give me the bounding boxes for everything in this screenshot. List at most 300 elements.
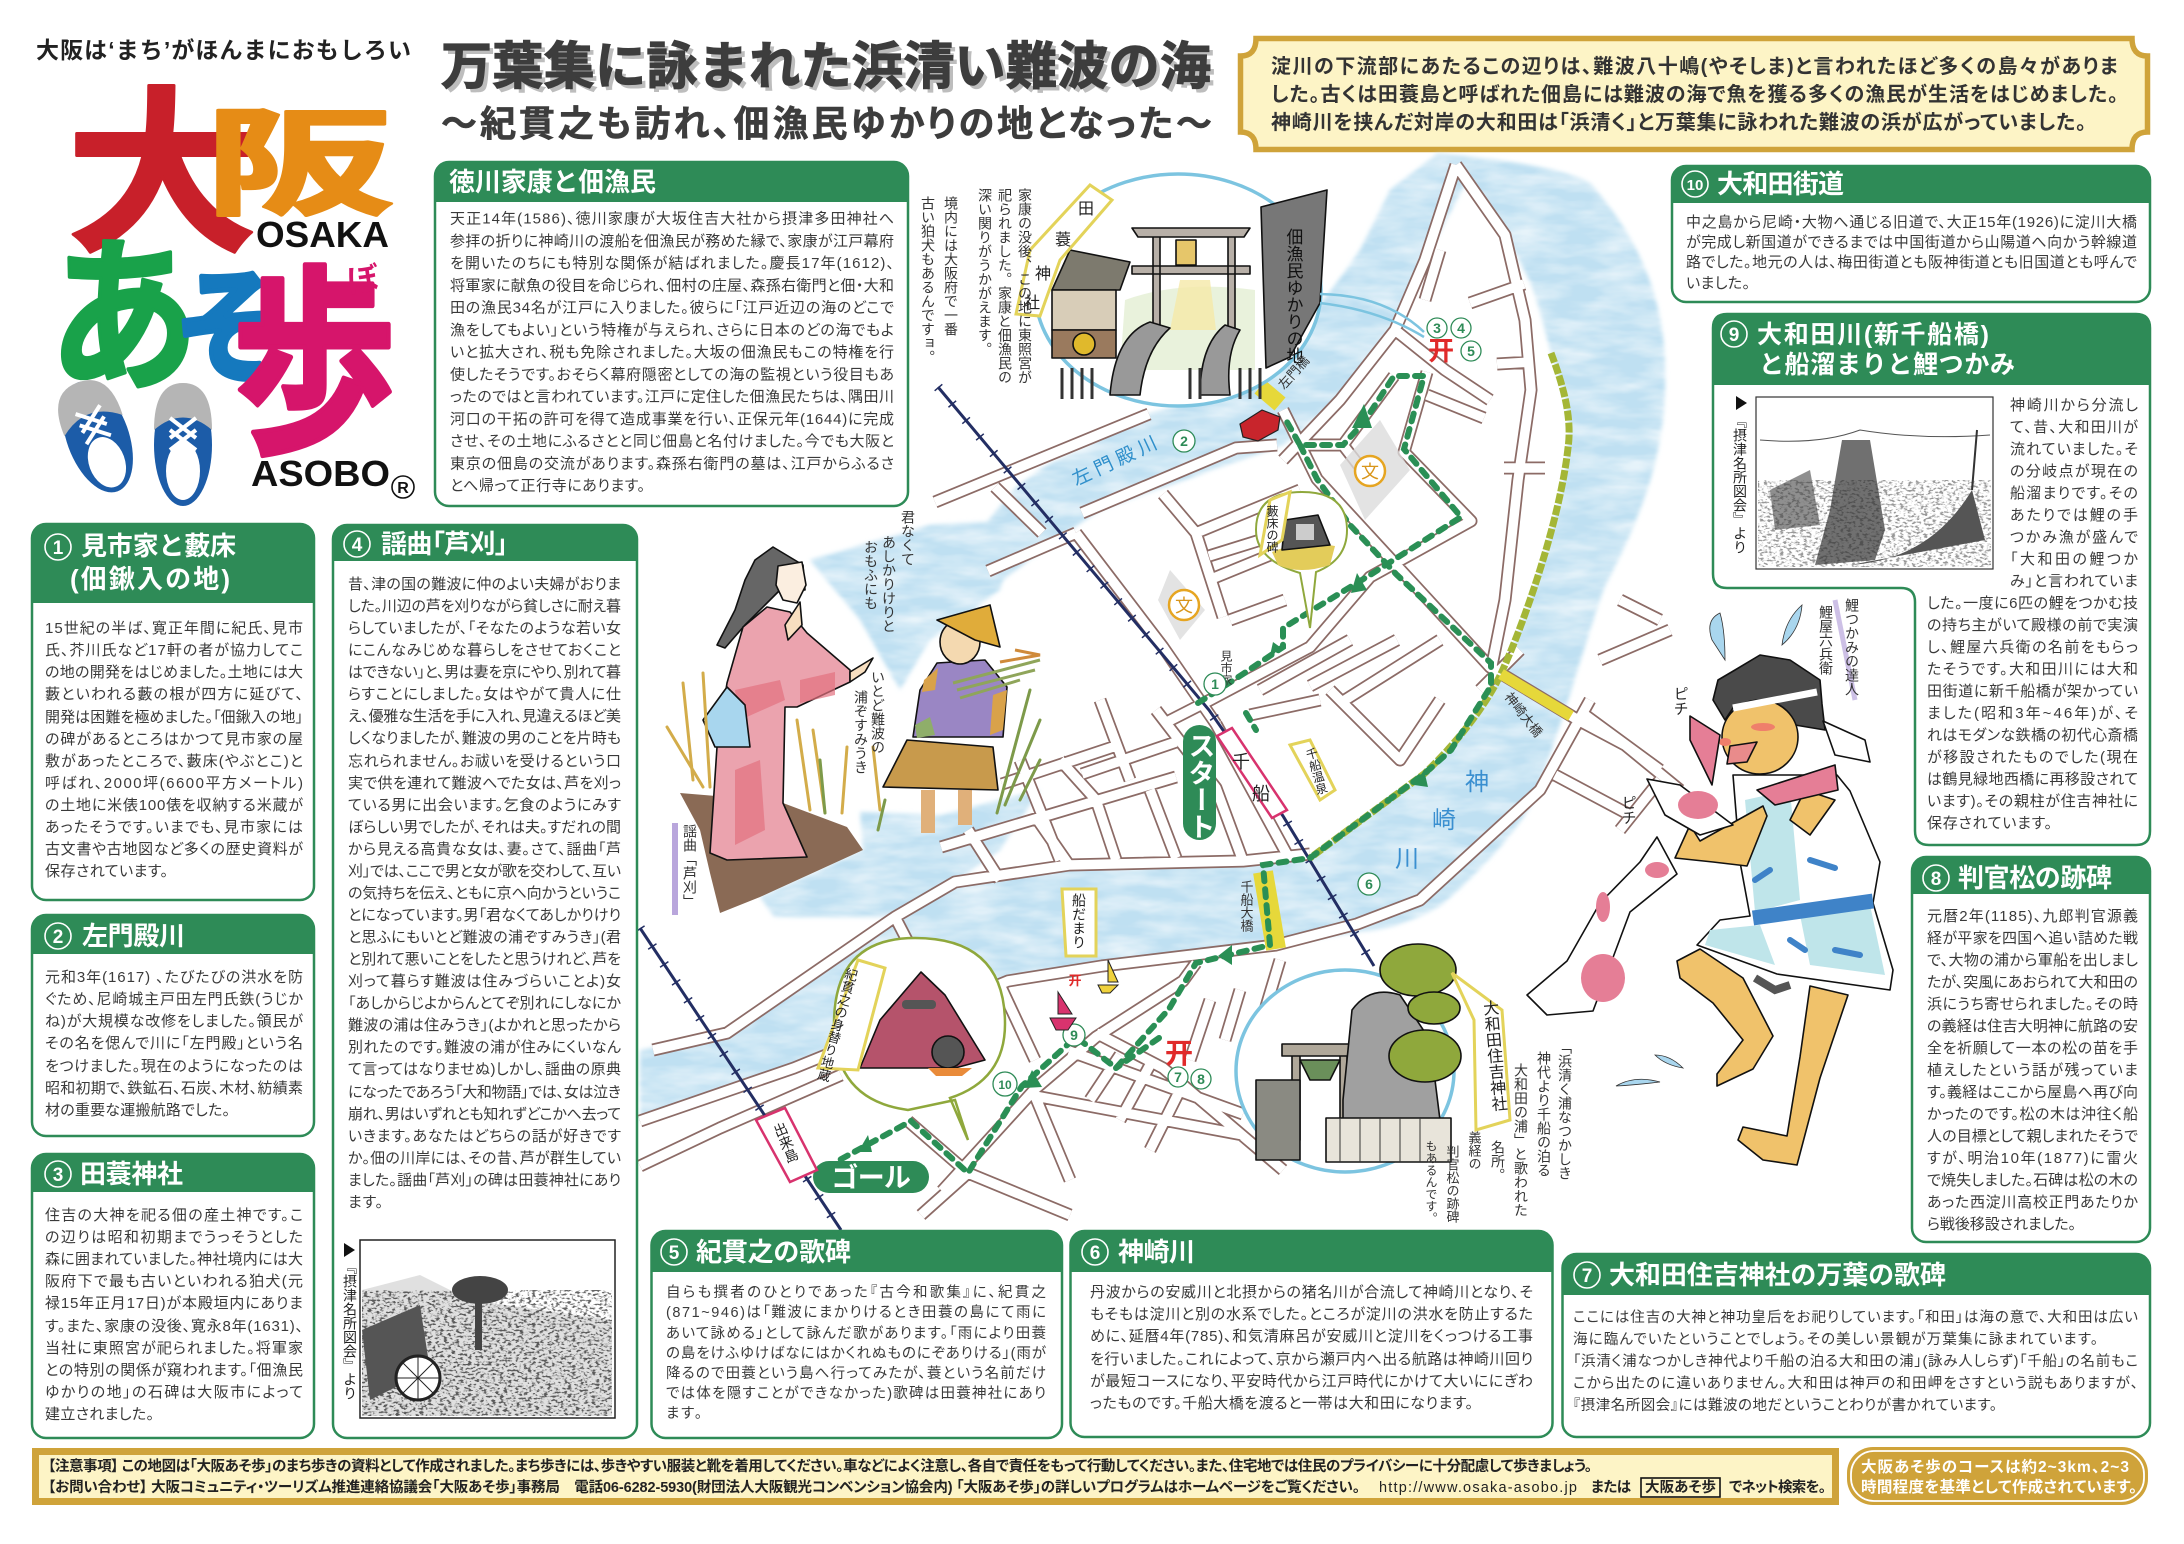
text block: み」と言われていま	[2010, 573, 2138, 590]
text block: もそもは淀川と別の水系でした。ところが淀川の洪水を防止するた	[1090, 1306, 1533, 1323]
text block: 当社に東照宮が祀られました。将軍家	[45, 1340, 303, 1357]
text block: 流れていました。そ	[2010, 441, 2138, 458]
panel: 6 Kanzaki river: 6	[1090, 1243, 1100, 1264]
map label: Samon bridge: 左門橋	[1275, 353, 1312, 392]
map label: Mitsuya bridges	[1219, 650, 1545, 933]
tagline: 大阪は‘まち’がほんまにおもしろい	[36, 37, 411, 63]
course note pill: 大阪あそ歩のコースは約2~3km、2~3	[1861, 1458, 2129, 1476]
bridges	[1260, 387, 1571, 949]
panel: 4 Noh play Ashikari: 謡曲「芦刈」	[381, 529, 508, 559]
text block: 使したそうです。おそらく幕府隠密としての海の監視という役目もあ	[450, 366, 894, 383]
school symbol	[1340, 420, 1410, 520]
text block: か。佃の川岸には、その昔、芦が群生してい	[348, 1150, 621, 1167]
text block: 「浜清く浦なつかしき神代より千船の泊る大和田の浦」(詠み人しらず)「千船」の名前もこ	[1573, 1353, 2138, 1370]
text block: 全を祈願して一本の松の苗を手	[1927, 1040, 2138, 1057]
text block: 「あしからじよからんとてぞ別れにしなにか	[348, 995, 621, 1012]
map label: Mitsuya bridges: 見市家	[1219, 650, 1233, 687]
text block: つかみ漁が盛んで	[2010, 529, 2138, 546]
boy legs	[1677, 949, 1773, 1086]
handwritten note: 家康の没後、この地に東照宮が	[1017, 187, 1033, 384]
text block: 「大和田の鯉つか	[2010, 551, 2138, 568]
bubble: monument: 藪床の碑	[1265, 505, 1279, 553]
green bank strip	[1310, 353, 1569, 858]
text block: と別れて悪いことをしたと思うけれど、芦を	[348, 951, 621, 968]
text block: (871~946)は「難波にまかりけるとき田蓑の島にて雨に	[666, 1304, 1046, 1321]
panel: 7 Owada Sumiyoshi shrine poem monument: 大和田住吉神社の万葉の歌碑	[1609, 1260, 1946, 1290]
text block: 田の漁民34名が江戸に入りました。彼らに「江戸近辺の海のどこで	[450, 300, 894, 316]
text block: が移設されたものでした(現在	[1927, 749, 2138, 766]
handwritten poem note: 判官松の跡碑	[1444, 1145, 1460, 1223]
text block	[1686, 214, 2137, 292]
text block: 海に臨んでいたということでしょう。その美しい景観が万葉集に詠まれています。	[1573, 1331, 2098, 1348]
number 10: 10	[998, 1078, 1012, 1092]
handwritten note: 祀られました。家康と佃漁民の	[997, 188, 1013, 384]
text block: の土地に米俵100俵を収納する米蔵が	[45, 797, 303, 814]
label: carp master	[1818, 598, 1860, 700]
text block: 神崎川から分流し	[2010, 397, 2138, 414]
torii mark and numbers: 7 8: 7	[1174, 1069, 1182, 1085]
text block: 人の目標として親しまれたそうで	[1927, 1128, 2138, 1145]
torii mark and numbers: 7 8	[1165, 1038, 1211, 1089]
panel: 2 Samondono river: 2	[53, 927, 63, 948]
number 10	[993, 1072, 1017, 1096]
panel: 1 Mitsuya family: 1	[53, 538, 64, 559]
connector lines to shrine	[1320, 294, 1424, 337]
panel: 3 Tamino shrine: 3	[53, 1165, 63, 1186]
pine tree	[1380, 944, 1461, 1082]
panel: 9 Owada river and carp catching: 9	[1729, 325, 1739, 346]
text block: の地の開発をはじめました。土地には大	[45, 664, 303, 681]
logo: Osaka Asobo: R	[397, 480, 409, 497]
panel: Tokugawa Ieyasu and Tsukuda fishermen: 徳川家康と佃漁民	[449, 167, 656, 197]
text block: の持ち主がいて殿様の前で実演	[1927, 617, 2138, 634]
text block	[348, 575, 622, 1211]
text block: 阪府下で最も古いといわれる狛犬(元	[45, 1273, 303, 1290]
text block: 建立されました。	[45, 1406, 154, 1423]
panel: 9 Owada river and carp catching: と船溜まりと鯉つかみ	[1759, 351, 2015, 379]
boats	[1050, 960, 1118, 1030]
text block: 実で供を連れて難波へでた女は、芦を刈っ	[348, 775, 621, 792]
text block: とになっています。男「君なくてあしかりけり	[348, 907, 621, 924]
panel: 8 Hangan pine monument	[1912, 857, 2150, 1242]
text block	[1927, 397, 2138, 832]
text block: かったのです。松の木は沖往く船	[1927, 1106, 2138, 1123]
text block: らしていましたが、「そなたのような若い女	[348, 620, 621, 637]
text block: し、鯉屋六兵衛の名前をもらっ	[1927, 639, 2138, 656]
text block: はできない」と、男は妻を京にやり、別れて暮	[348, 664, 621, 681]
text block: す。義経はここから屋島へ再び向	[1927, 1084, 2138, 1101]
icon: right shoe	[154, 383, 212, 506]
text block: いました。	[1686, 275, 1750, 292]
text block: 保存されています。	[1927, 815, 2052, 832]
text block: と思ふにもいとど難波の浦ぞすみうき」(君	[348, 929, 621, 946]
label: Tamino shrine	[1016, 185, 1112, 316]
poem note: Ashikari: おもふにも	[863, 540, 879, 610]
text block: 材の重要な運搬航路でした。	[45, 1102, 230, 1119]
text block: を開いたのちにも特別な関係が結ばれました。慶長17年(1612)、	[450, 255, 894, 272]
panel: 7 Owada Sumiyoshi shrine poem monument: 7	[1582, 1266, 1592, 1287]
poem note: Ashikari: あしかりけりと	[881, 535, 897, 633]
text block: 森に囲まれていました。神社境内には大	[45, 1251, 303, 1268]
text block	[45, 620, 303, 880]
panel: 5 Ki no Tsurayuki poem monument: 紀貫之の歌碑	[696, 1237, 851, 1267]
handwritten poem note: もあるんです。	[1424, 1140, 1438, 1224]
stone monument	[1261, 190, 1327, 368]
text block: ら戦後移設されました。	[1927, 1216, 2076, 1233]
goal pill	[813, 1161, 929, 1193]
text block: の碑があるところはかつて見市家の屋	[45, 731, 303, 748]
text block: 15世紀の半ば、寛正年間に紀氏、見市	[45, 620, 303, 637]
text block	[1090, 1284, 1533, 1412]
sound words: ピチ	[1620, 795, 1636, 825]
text block: すが、明治10年(1877)に雷火	[1927, 1150, 2138, 1167]
number 9	[1063, 1024, 1085, 1046]
text block: その名を偲んで川に「左門殿」という名	[45, 1035, 303, 1052]
text block: ぼらしい男でしたが、それは夫。すだれの間	[348, 819, 621, 836]
text block	[1573, 1309, 2138, 1414]
course note pill: 時間程度を基準として作成されています。	[1861, 1477, 2137, 1496]
panel: 4 Noh play Ashikari	[333, 525, 637, 1438]
text block: いと拡大され、税も免除されました。大坂の佃漁民もこの特権を行	[450, 344, 894, 361]
footer notes	[36, 1452, 1836, 1502]
text block: 漁をしてもよい」という特権が与えられ、さらに日本のどの海でもよ	[450, 322, 894, 339]
logo: Osaka Asobo: OSAKA	[256, 214, 389, 255]
text block: 元暦2年(1185)、九郎判官源義	[1927, 908, 2138, 925]
number 2: 2	[1180, 433, 1188, 449]
logo: Osaka Asobo: ぼ	[344, 260, 381, 300]
text block: ゆかりの地」の石碑は大阪市によって	[45, 1384, 303, 1401]
text block: 崩れ、男はいずれとも知れずどこかへ去って	[348, 1106, 621, 1123]
text block	[1927, 908, 2138, 1233]
text block: から見える高貴な女は、妻。さて、謡曲「芦	[348, 841, 621, 858]
text block: たが、突風にあおられて大和田の	[1927, 974, 2138, 991]
text block: ました。謡曲「芦刈」の碑は田蓑神社にあり	[348, 1172, 621, 1189]
shrine illustration circle: Owada Sumiyoshi	[1236, 944, 1510, 1172]
panel: 2 Samondono river: 左門殿川	[82, 921, 185, 951]
handwritten poem note	[1424, 1040, 1573, 1224]
text block: ぐため、尼崎城主戸田左門氏鉄(うじか	[45, 991, 303, 1008]
text block: 降るので田蓑という島へ行ってみたが、蓑という名前だけ	[666, 1365, 1046, 1382]
panel: 8 Hangan pine monument: 判官松の跡碑	[1958, 863, 2112, 893]
illustration: woman in pink kimono	[680, 547, 873, 913]
label: Owada Sumiyoshi shrine	[1452, 973, 1510, 1130]
illustration: man with straw hat and reeds	[883, 605, 1040, 833]
label: Noh Ashikari: 謡曲「芦刈」	[682, 824, 698, 908]
map label: Kanzaki river: 崎	[1432, 807, 1456, 834]
station label: Dekijima: 出来島	[771, 1120, 801, 1165]
bubble: hooded Jizo: 紀貫之の身替り地蔵	[814, 966, 859, 1084]
panel: 4 Noh play Ashikari: 4	[352, 535, 363, 556]
text block: ったものです。千船大橋を渡ると一帯は大和田になります。	[1090, 1395, 1473, 1412]
text block: めに、延暦4年(785)、和気清麻呂が安威川と淀川をくっつける工事	[1090, 1328, 1533, 1345]
text block	[450, 210, 894, 494]
boats: 开	[1068, 973, 1082, 988]
text block: て、昔、大和田川が	[2010, 419, 2138, 436]
station label: Chibune	[1217, 728, 1287, 818]
panel: 6 Kanzaki river	[1070, 1231, 1552, 1437]
footer notes: 【お問い合わせ】 大阪コミュニティ・ツーリズム推進連絡協議会「大阪あそ歩」事務局 電話06-6282-5930(財団法人大阪観光コンベンション協会内) 「大阪あそ歩」の詳しいプログラムはホームページをご覧ください。	[48, 1478, 1360, 1496]
intro box: 淀川の下流部にあたるこの辺りは、難波八十嶋(やそしま)と言われたほど多くの島々がありま	[1271, 54, 2118, 78]
number 9: 9	[1070, 1027, 1078, 1043]
handwritten poem note: 神代より千船の泊る	[1536, 1051, 1552, 1177]
text block: で、大物の浦から軍船を出しまし	[1927, 952, 2138, 969]
poem note: Ashikari: 君なくて	[900, 510, 916, 566]
text block: ったのではと言われています。江戸に定住した佃漁民たちは、隅田川	[450, 388, 894, 406]
text block: 開発は困難を極めました。「佃鍬入の地」	[45, 709, 303, 726]
text block: 刈って暮らす難波は住みづらいことよ)女	[348, 973, 621, 990]
walking route	[834, 376, 1491, 1173]
text block: あたりでは鯉の手	[2010, 507, 2138, 524]
text block: した。川辺の芦を刈りながら貧しさに耐え暮	[348, 598, 621, 615]
course note pill	[1847, 1447, 2148, 1505]
text block: になったであろう「大和物語」では、女は泣き	[348, 1084, 621, 1101]
panel: 10 Owada Kaido: 大和田街道	[1717, 169, 1844, 199]
text block: 元和3年(1617) 、たびたびの洪水を防	[45, 969, 303, 986]
text block: ここには住吉の大神と神功皇后をお祀りしています。「和田」は海の意で、大和田は広い	[1573, 1309, 2138, 1326]
text block: れはモダンな鉄橋の初代心斎橋	[1927, 727, 2138, 744]
station label: Chibune: 船	[1252, 784, 1270, 804]
text block: 河口の干拓の許可を得て造成事業を行い、正保元年(1644)に完成	[450, 411, 894, 428]
text block	[45, 1207, 303, 1423]
station label: Dekijima	[756, 1108, 817, 1182]
panel: 9 Owada river and carp catching: 大和田川(新千船橋)	[1757, 321, 1989, 349]
text block: いきます。あなたはどちらの話が好きです	[348, 1128, 621, 1145]
red car	[1240, 410, 1280, 441]
text block: 中之島から尼崎・大物へ通じる旧道で、大正15年(1926)に淀川大橋	[1686, 214, 2137, 231]
text block: え、優雅な生活を手に入れ、見違えるほど美	[348, 708, 621, 725]
text block: らすことにしました。女はやがて貴人に仕	[348, 686, 621, 703]
map label: Mitsuya bridges: 千船大橋	[1238, 880, 1254, 933]
torii mark and numbers: 3 4 5	[1427, 318, 1481, 366]
torii mark and numbers: 7 8: 开	[1165, 1038, 1193, 1069]
boy happi coat	[1697, 775, 1893, 990]
text block: 難波の浦は住みうき」(よかれと思ったから	[348, 1017, 621, 1034]
logo: Osaka Asobo: 大	[66, 76, 258, 276]
tag: Chibune onsen	[1290, 740, 1335, 800]
text block: にこんなみじめな暮らしをさせておくこと	[348, 642, 621, 659]
tag: boat basin	[1062, 889, 1096, 956]
text block: ね)が大規模な改修をしました。領民が	[45, 1013, 303, 1030]
text block: 昔、津の国の難波に仲のよい夫婦がおりま	[348, 575, 621, 593]
station label: Chibune: 千	[1232, 752, 1250, 772]
text block: とへ帰って正行寺にあります。	[450, 476, 645, 494]
logo: Osaka Asobo: ASOBO	[251, 453, 390, 494]
text block: 丹波からの安威川と北摂からの猪名川が合流して神崎川となり、そ	[1090, 1284, 1533, 1301]
text block: 参拝の折りに神崎川の渡船を佃漁民が務めた縁で、家康が江戸幕府	[450, 233, 894, 250]
handwritten poem note: 大和田の浦」と歌われた	[1513, 1063, 1529, 1217]
bubble: monument	[1256, 492, 1347, 628]
caption: Settsu Meisho Zue: 『摂津名所図会』より	[342, 1260, 358, 1400]
falling carp	[1527, 837, 1677, 1015]
text block: あった西淀川高校正門あたりか	[1927, 1194, 2138, 1211]
sound words: ピチ	[1672, 686, 1688, 716]
number 6: 6	[1365, 876, 1373, 892]
text block: あったそうです。いまでも、見市家には	[45, 819, 303, 836]
number 1	[1204, 673, 1226, 695]
text block: 天正14年(1586)、徳川家康が大坂住吉大社から摂津多田神社へ	[450, 210, 894, 228]
text block: 氏、芥川氏など17軒の者が協力してこ	[45, 642, 303, 659]
text block: との特別の関係が窺われます。「佃漁民	[45, 1362, 303, 1379]
footer notes: または	[1591, 1479, 1632, 1496]
number 6	[1358, 873, 1380, 895]
handwritten note: 深い関りがうかがえます。	[977, 188, 993, 356]
text block: が完成し新国道ができるまでは中国街道から山陽道へ向かう幹線道	[1686, 234, 2137, 251]
caption: Settsu Meisho Zue: 『摂津名所図会』より	[1732, 414, 1748, 554]
text block: 浜にうち寄せられました。その時	[1927, 996, 2138, 1013]
text block: を行いました。これによって、京から瀬戸内へ出る航路は神崎川回り	[1090, 1351, 1533, 1368]
roads	[640, 165, 1680, 1215]
text block	[45, 969, 303, 1119]
stone monument: 佃漁民ゆかりの地	[1284, 228, 1303, 364]
torii mark and numbers: 3 4 5: 开	[1428, 336, 1454, 366]
handwritten poem note: 「浜清く浦なつかしき	[1557, 1040, 1573, 1180]
tag: boat basin: 船だまり	[1071, 893, 1087, 949]
panel: 1 Mitsuya family	[32, 524, 314, 900]
railway lines	[640, 387, 1374, 1230]
poem note: Ashikari: いとど難波の	[870, 670, 886, 754]
boy face	[1713, 655, 1825, 730]
text block: 呼ばれ、2000坪(6600平方メートル)	[45, 775, 303, 792]
water drops	[1616, 605, 1802, 1086]
old print: carp fishing	[1756, 397, 1993, 569]
text block: 昭和初期で、鉄鉱石、石炭、木材、紡績素	[45, 1080, 303, 1097]
text block: の島をけふゆけばなにはかくれぬものにぞありける」(雨が	[666, 1345, 1047, 1362]
panel: 10 Owada Kaido: 10	[1687, 177, 1703, 194]
text block	[666, 1284, 1047, 1422]
text block: あいて詠める」として詠んだ歌があります。「雨により田蓑	[666, 1325, 1046, 1342]
map label: Samondono river: 左門殿川	[1069, 430, 1165, 491]
label: carp master: 鯉つかみの達人	[1844, 598, 1860, 696]
panel: 3 Tamino shrine	[32, 1154, 314, 1438]
text block: す。また、家康の没後、寛永8年(1631)、	[45, 1318, 303, 1335]
map	[640, 154, 1893, 1230]
text block: ます。	[666, 1405, 702, 1422]
sound words	[1620, 686, 1688, 825]
text block: しくなりましたが、難波の男のことを片時も	[348, 730, 621, 747]
text block: ている男に出会います。乞食のようにみす	[348, 797, 621, 814]
route arrows	[858, 404, 1428, 1152]
footer notes: 大阪あそ歩	[1645, 1478, 1716, 1496]
panel: 3 Tamino shrine: 田蓑神社	[80, 1159, 183, 1189]
label: Tamino shrine: 田蓑神社	[1024, 201, 1094, 312]
map label: Mitsuya bridges: 神崎大橋	[1502, 690, 1545, 740]
text block: ます。	[348, 1194, 383, 1211]
text block: させ、その土地にふるさとと同じ佃島と名付けました。今でも大阪と	[450, 433, 894, 450]
text block: ました(昭和3年~46年)が、そ	[1927, 705, 2138, 722]
text block: の気持ちを伝え、ともに京へ向かうというこ	[348, 885, 621, 902]
text block: 住吉の大神を祀る佃の産土神です。こ	[45, 1207, 303, 1224]
intro box: した。古くは田蓑島と呼ばれた佃島には難波の海で魚を獲る多くの漁民が生活をはじめました。	[1271, 82, 2118, 106]
text block: 東京の佃島の交流があります。森孫右衛門の墓は、江戸からふるさ	[450, 455, 894, 472]
map label: Kanzaki river: 川	[1395, 846, 1419, 873]
text block: した。一度に6匹の鯉をつかむ技	[1927, 595, 2138, 612]
text block: 『摂津名所図会』には難波の地だということわりが書かれています。	[1573, 1397, 1997, 1414]
shrine illustration circle: Tamino	[1016, 174, 1327, 406]
text block: 保存されています。	[45, 863, 168, 880]
panel: 7 Owada Sumiyoshi shrine poem monument	[1562, 1254, 2150, 1437]
water: rivers	[640, 154, 1665, 1121]
text block: たそうです。大和田川には大和	[1927, 661, 2138, 678]
panel: 1 Mitsuya family: (佃鍬入の地)	[70, 564, 230, 594]
handwritten note: 境内には大阪府で一番	[943, 196, 959, 336]
logo: Osaka Asobo: あ	[50, 224, 197, 412]
old print: ox cart	[360, 1240, 615, 1418]
text block: 藪といわれる藪の根が四方に延びて、	[45, 686, 303, 703]
handwritten note: 古い狛犬もあるんですョ。	[920, 196, 936, 364]
text block: 別れたのです。難波の浦が住みにくいなん	[348, 1039, 622, 1056]
text block: 植えしたという話が残っていま	[1927, 1062, 2138, 1079]
text block: 刈」では、ここで男と女が歌を交わして、互い	[348, 863, 621, 880]
panel: 2 Samondono river	[32, 915, 314, 1136]
torii mark and numbers: 3 4 5: 4	[1457, 320, 1465, 336]
text block: 禄15年正月17日)が本殿垣内にありま	[45, 1295, 303, 1312]
text block: 将軍家に献魚の役目を命じられ、佃村の庄屋、森孫右衛門と佃・大和	[450, 277, 894, 294]
school symbol	[1158, 570, 1205, 640]
panel: 9 Owada river and carp catching	[1713, 314, 2150, 845]
text block: で焼失しました。石碑は松の木の	[1927, 1172, 2138, 1189]
poem note: Ashikari: 浦ぞすみうき	[853, 690, 869, 774]
text block: の辺りは昭和初期までうっそうとした	[45, 1229, 303, 1246]
illustration: reeds	[667, 673, 1040, 830]
bubble: hooded Jizo	[814, 938, 1005, 1140]
footer notes: 【注意事項】 この地図は「大阪あそ歩」のまち歩きの資料として作成されました。まち歩きには、歩きやすい服装と靴を着用してください。車などによく注意し、各自で責任をもって行動してください。また、住宅地では住民のプライバシーに十分配慮して歩きましょう。	[48, 1457, 1592, 1475]
text block: 古文書や古地図など多くの歴史資料が	[45, 840, 303, 858]
text block: 敷があったところで、藪床(やぶとこ)と	[45, 752, 303, 770]
text block: 忘れられません。お祓いを受けるという口	[348, 753, 621, 770]
text block: をつけました。現在のようになったのは	[45, 1058, 303, 1075]
footer notes: でネット検索を。	[1729, 1479, 1826, 1496]
map label: Kanzaki river: 神	[1465, 769, 1489, 796]
start pill: スタート	[1184, 732, 1214, 840]
label: Owada Sumiyoshi shrine: 大和田住吉神社	[1480, 999, 1508, 1112]
title: 万葉集に詠まれた浜清い難波の海	[445, 42, 1215, 99]
handwritten note	[920, 187, 1033, 384]
torii mark and numbers: 3 4 5: 5	[1467, 343, 1475, 359]
handwritten poem note: 名所。	[1490, 1140, 1506, 1182]
number 1: 1	[1211, 676, 1219, 692]
title: 万葉集に詠まれた浜清い難波の海	[441, 38, 1211, 95]
logo: Osaka Asobo: 阪	[205, 99, 394, 230]
text block: では体を隠すことができなかった)歌碑は田蓑神社にあり	[666, 1385, 1046, 1402]
poem note: Ashikari	[853, 510, 916, 774]
panel: 1 Mitsuya family: 見市家と藪床	[81, 531, 236, 561]
goal pill: ゴール	[831, 1162, 911, 1193]
text block: が最短コースになり、平安時代から江戸時代にかけて大いににぎわ	[1090, 1373, 1533, 1390]
logo: Osaka Asobo	[49, 76, 414, 506]
logo: Osaka Asobo: そ	[178, 261, 278, 399]
number 2	[1173, 430, 1195, 452]
text block: て言ってはなりませぬ)しかし、謡曲の原典	[348, 1061, 621, 1078]
handwritten poem note: 義経の	[1466, 1130, 1482, 1170]
label: Noh Ashikari	[672, 823, 698, 915]
logo: Osaka Asobo: 歩	[232, 254, 397, 480]
text block: は鶴見緑地西橋に再移設されて	[1927, 771, 2138, 788]
text block: こから出たのに違いありません。大和田は神戸の和田岬をさすという説もありますが、	[1573, 1375, 2138, 1392]
text block: 田街道に新千船橋が架かってい	[1927, 683, 2138, 700]
torii mark and numbers: 7 8: 8	[1197, 1071, 1205, 1087]
illustration: boy catching carp	[1527, 598, 1893, 1165]
subtitle: 〜紀貫之も訪れ、佃漁民ゆかりの地となった〜	[441, 103, 1212, 144]
map label: Kanzaki river	[1395, 769, 1489, 873]
tag: Chibune onsen: 千船温泉	[1303, 746, 1329, 796]
panel: 5 Ki no Tsurayuki poem monument	[652, 1231, 1062, 1438]
icon: left shoe	[49, 372, 147, 502]
text block: 路でした。地元の人は、梅田街道とも阪神街道とも旧国道とも呼んで	[1686, 254, 2137, 271]
panel: 8 Hangan pine monument: 8	[1931, 869, 1941, 890]
label: carp master: 鯉屋六兵衛	[1818, 605, 1834, 675]
text block: 経が平家を四国へ追い詰めた戦	[1927, 930, 2138, 947]
panel: 6 Kanzaki river: 神崎川	[1118, 1237, 1195, 1267]
